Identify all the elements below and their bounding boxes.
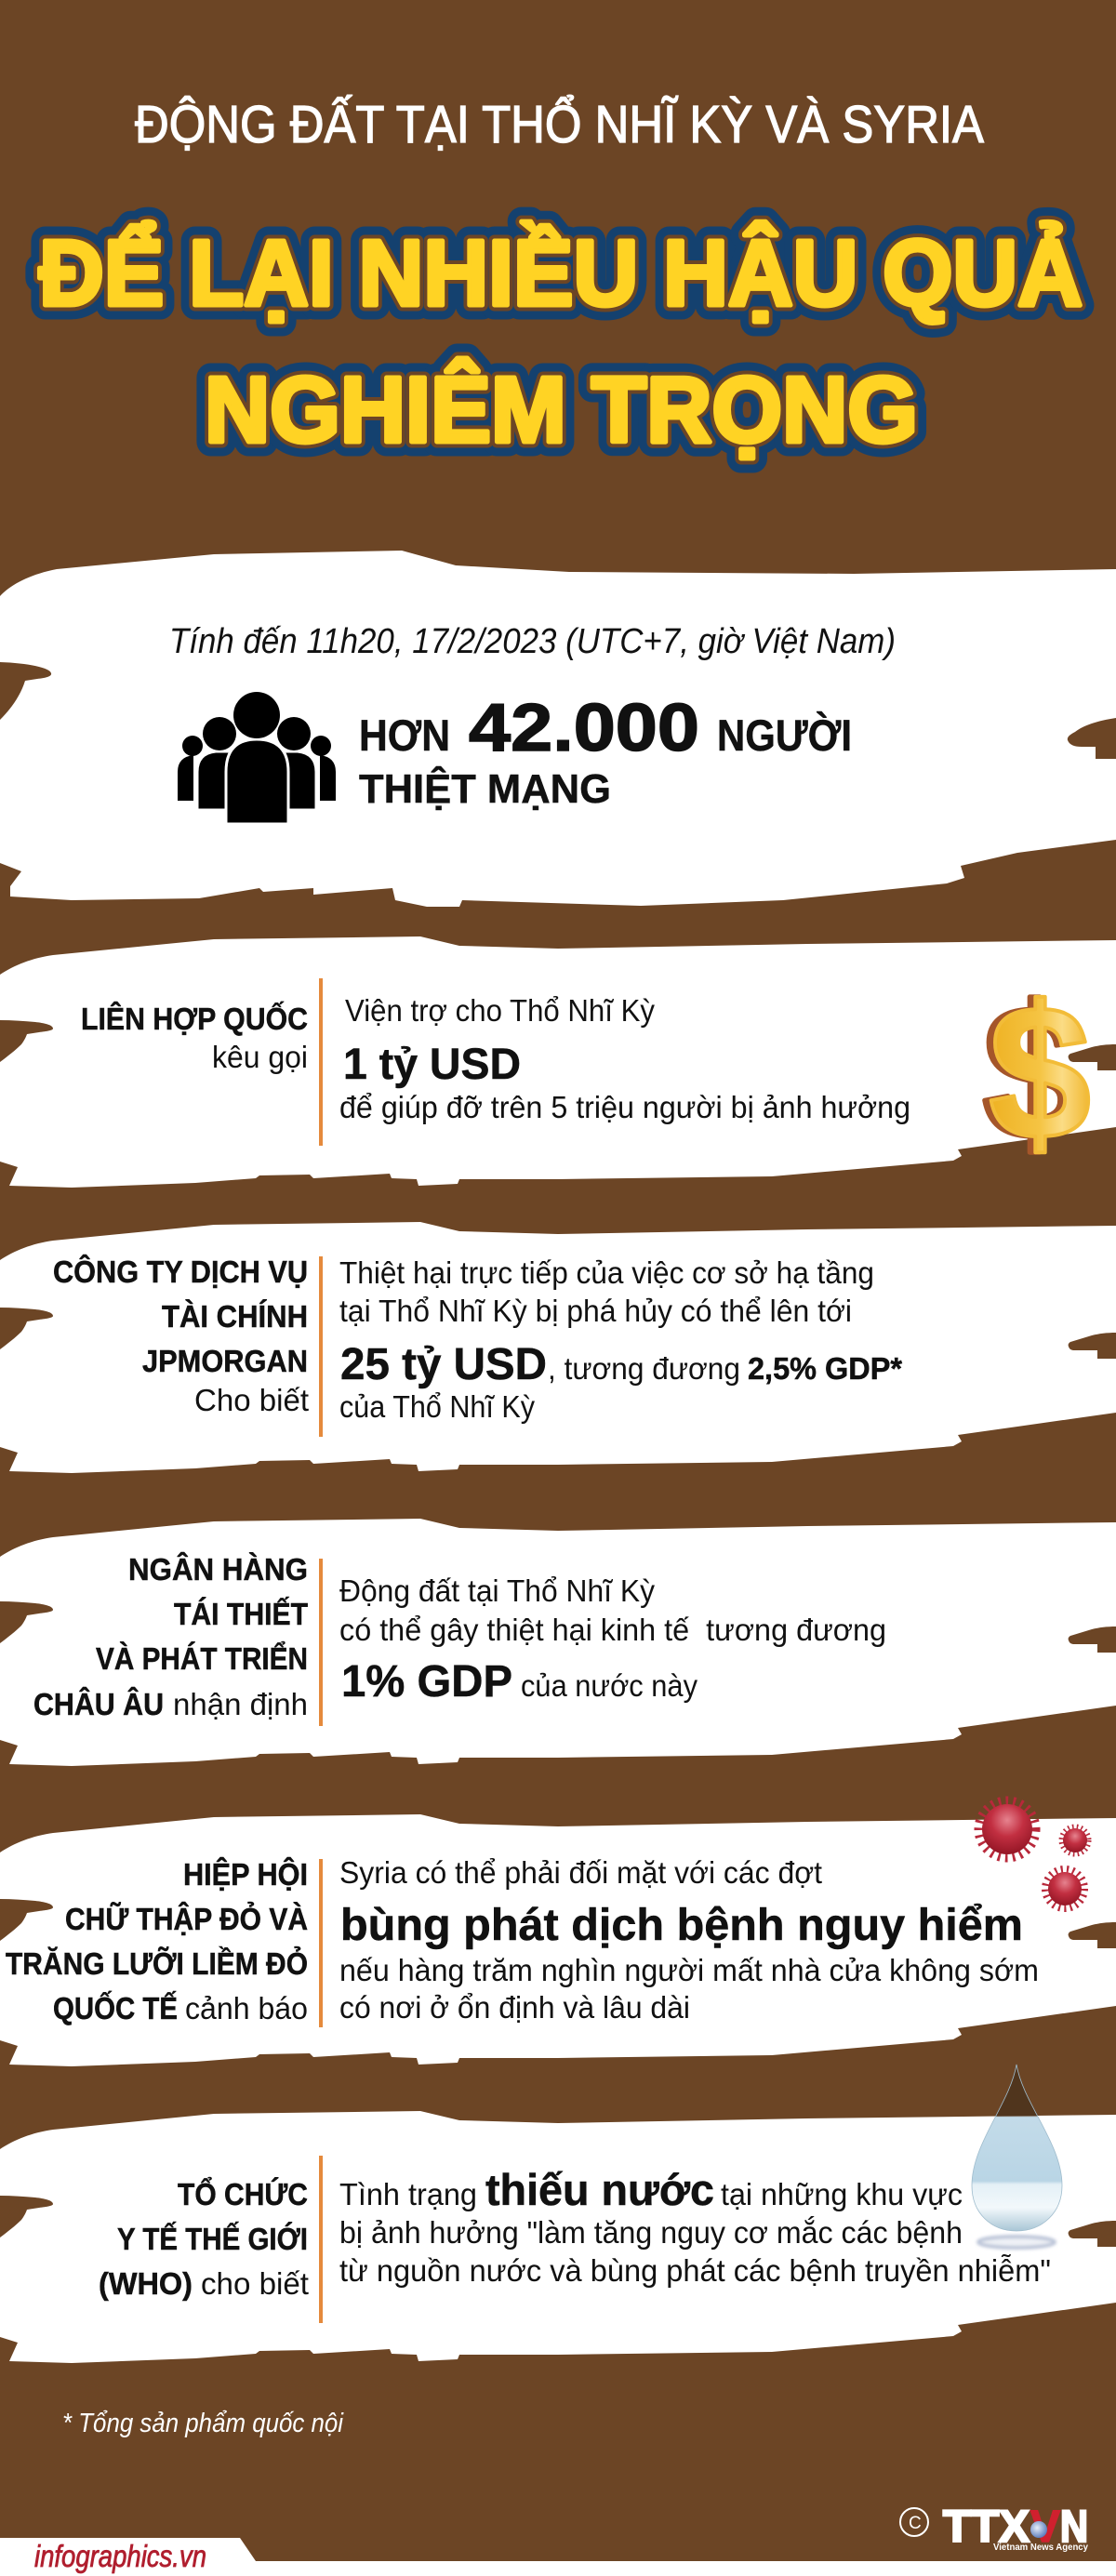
- body text: tại Thổ Nhĩ Kỳ bị phá hủy có thể lên tới: [339, 1295, 852, 1329]
- body text: [339, 2165, 1051, 2289]
- body text: có nơi ở ổn định và lâu dài: [339, 1991, 690, 2025]
- source label: [81, 1001, 308, 1075]
- panel: JPMorgan: [0, 1222, 1116, 1473]
- body text: 25 tỷ USD: [340, 1340, 547, 1389]
- divider: [319, 1256, 323, 1437]
- site credit: infographics.vn: [34, 2539, 206, 2573]
- title: ĐỂ LẠI NHIỀU HẬU QUẢ: [39, 220, 1083, 325]
- headline: death count: THIỆT MẠNG: [359, 765, 611, 812]
- date line: Tính đến 11h20, 17/2/2023 (UTC+7, giờ Việt Nam): [169, 622, 896, 661]
- icon: dollar sign: $: [982, 966, 1086, 1179]
- source label: [53, 1254, 310, 1418]
- headline: death count: HƠN: [359, 710, 450, 760]
- icon: viruses: [980, 1802, 1088, 1907]
- source label: [6, 1856, 308, 2026]
- panel shape: [0, 1222, 1116, 1473]
- panel shape: [0, 1519, 1116, 1766]
- body text: Viện trợ cho Thổ Nhĩ Kỳ: [345, 994, 655, 1029]
- body text: , tương đương: [548, 1352, 740, 1387]
- source label: CHỮ THẬP ĐỎ VÀ: [65, 1902, 308, 1937]
- body text: bùng phát dịch bệnh nguy hiểm: [340, 1901, 1023, 1950]
- logo: TTXVN: V: [1030, 2503, 1060, 2552]
- source label: (WHO): [99, 2267, 193, 2302]
- source label: kêu gọi: [212, 1041, 308, 1075]
- footnote: * Tổng sản phẩm quốc nội: [62, 2409, 344, 2438]
- subtitle: ĐỘNG ĐẤT TẠI THỔ NHĨ KỲ VÀ SYRIA: [135, 94, 984, 154]
- body text: có thể gây thiệt hại kinh tế tương đương: [339, 1613, 886, 1648]
- title: [39, 220, 1083, 462]
- source label: cho biết: [201, 2267, 310, 2302]
- panel shape: [0, 551, 1116, 907]
- logo: TTXVN: TTX: [943, 2503, 1030, 2552]
- body text: Syria có thể phải đối mặt với các đợt: [339, 1856, 823, 1891]
- source label: TỔ CHỨC: [178, 2177, 308, 2212]
- source label: CHÂU ÂU: [33, 1687, 164, 1722]
- logo: TTXVN: Vietnam News Agency: [993, 2543, 1088, 2553]
- title: NGHIÊM TRỌNG: [205, 358, 918, 462]
- title: NGHIÊM TRỌNG: [205, 358, 918, 462]
- source label: [99, 2177, 310, 2302]
- icon: people: [178, 692, 336, 824]
- source label: cảnh báo: [185, 1992, 308, 2026]
- source label: CÔNG TY DỊCH VỤ: [53, 1254, 308, 1290]
- title: ĐỂ LẠI NHIỀU HẬU QUẢ: [39, 220, 1083, 325]
- panel shape: [0, 936, 1116, 1188]
- source label: LIÊN HỢP QUỐC: [81, 1001, 308, 1037]
- body text: của Thổ Nhĩ Kỳ: [339, 1390, 535, 1425]
- headline: death count: NGƯỜI: [717, 710, 852, 760]
- panel: United Nations: [0, 936, 1116, 1188]
- panel: death toll: [0, 551, 1116, 907]
- source label: JPMORGAN: [142, 1345, 308, 1379]
- source label: HIỆP HỘI: [183, 1856, 308, 1892]
- body text: thiếu nước: [485, 2165, 714, 2214]
- panel: Red Cross: [0, 1802, 1116, 2066]
- source label: VÀ PHÁT TRIỂN: [96, 1641, 308, 1677]
- source label: TÀI CHÍNH: [162, 1299, 308, 1334]
- logo: TTXVN: N: [1060, 2503, 1088, 2552]
- source label: [33, 1552, 308, 1722]
- source label: NGÂN HÀNG: [128, 1552, 308, 1587]
- source label: Y TẾ THẾ GIỚI: [117, 2222, 308, 2257]
- icon: water drop: [972, 2065, 1062, 2248]
- panel: EBRD: [0, 1519, 1116, 1766]
- headline: death count: 42.000: [469, 691, 699, 765]
- body text: [339, 1856, 1039, 2025]
- body text: để giúp đỡ trên 5 triệu người bị ảnh hưởng: [339, 1091, 910, 1125]
- body text: 2,5% GDP*: [748, 1351, 902, 1386]
- panel shape: [0, 1814, 1116, 2066]
- body text: 1% GDP: [341, 1657, 512, 1706]
- body text: nếu hàng trăm nghìn người mất nhà cửa không sớm: [339, 1954, 1039, 1988]
- body text: [339, 994, 910, 1125]
- divider: [319, 978, 323, 1146]
- source label: Cho biết: [194, 1384, 310, 1418]
- divider: [319, 1559, 323, 1726]
- body text: Động đất tại Thổ Nhĩ Kỳ: [339, 1574, 655, 1609]
- source label: nhận định: [173, 1688, 308, 1722]
- body text: 1 tỷ USD: [343, 1039, 521, 1088]
- copyright mark: C: [909, 2514, 922, 2533]
- panel: WHO: [0, 2065, 1116, 2363]
- title: NGHIÊM TRỌNG: [205, 358, 918, 462]
- body text: [339, 1256, 902, 1425]
- body text: bị ảnh hưởng "làm tăng nguy cơ mắc các bệnh: [339, 2215, 963, 2251]
- source label: TÁI THIẾT: [174, 1597, 308, 1632]
- body text: từ nguồn nước và bùng phát các bệnh truyền nhiễm": [339, 2253, 1051, 2289]
- icon: dollar sign: $: [989, 966, 1091, 1179]
- footer strip: [0, 2538, 1116, 2576]
- body text: [339, 1574, 886, 1706]
- divider: [319, 1859, 323, 2027]
- logo: TTXVN: [900, 2503, 1088, 2553]
- title: ĐỂ LẠI NHIỀU HẬU QUẢ: [39, 220, 1083, 325]
- body text: Tình trạng: [339, 2178, 477, 2212]
- divider: [319, 2156, 323, 2323]
- source label: TRĂNG LƯỠI LIỀM ĐỎ: [6, 1946, 308, 1982]
- body text: của nước này: [521, 1669, 698, 1704]
- body text: Thiệt hại trực tiếp của việc cơ sở hạ tầng: [339, 1256, 874, 1291]
- panel shape: [0, 2111, 1116, 2363]
- copyright mark: [900, 2508, 928, 2536]
- body text: tại những khu vực: [721, 2178, 963, 2212]
- source label: QUỐC TẾ: [53, 1990, 178, 2026]
- headline: death count: [359, 691, 852, 812]
